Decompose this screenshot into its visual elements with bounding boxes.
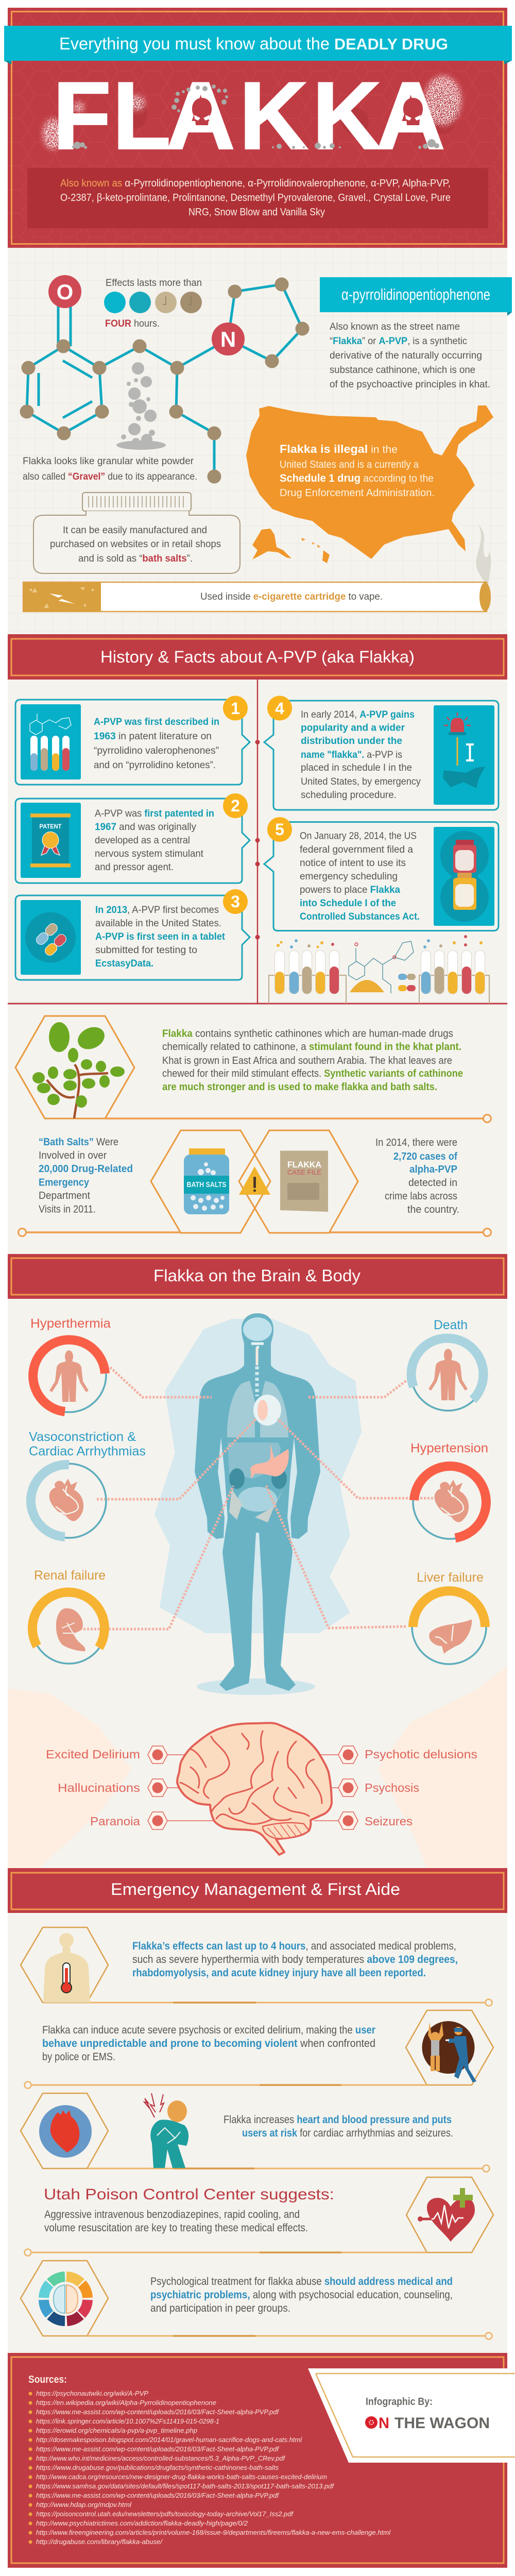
card 5: federal notice: On January 28, 2014, the US [300, 831, 417, 842]
panel: heart risk [21, 2093, 489, 2172]
badge 4 [267, 696, 292, 720]
text: crime lab cases: alpha-PVP [409, 1164, 457, 1175]
text: cathinones: Flakka contains synthetic cathinones which are human-made drugs [162, 1028, 453, 1040]
icon: patent certificate: PATENT [39, 823, 62, 830]
text: emergency visits: Department [39, 1190, 90, 1201]
text: crime lab cases: In 2014, there were [375, 1137, 457, 1148]
card 5: federal notice: Controlled Substances Act. [300, 911, 420, 922]
panel: psychological treatment: psychiatric problems, along with psychosocial education, counseling, [150, 2289, 453, 2301]
text: emergency visits: “Bath Salts” Were [39, 1137, 118, 1148]
text: crime lab cases [375, 1137, 459, 1215]
source list: http://www.fireengineering.com/articles/print/volume-168/issue-9/departments/fireems/flakka-a-new-ems-challenge.html [36, 2529, 391, 2536]
card 1: first described: 1963 in patent literature on [94, 731, 212, 742]
card 4: gains popularity: name "flakka". a-PVP is [301, 750, 402, 760]
nitrogen atom: N [220, 327, 236, 351]
illustration: brain with effects [46, 1723, 477, 1855]
card 4: gains popularity: United States, by emergency [301, 776, 421, 787]
panel: khat plant [15, 1016, 491, 1122]
panel: hyperthermia effects: such as severe hyperthermia with body temperatures above 109 degrees, [132, 1954, 458, 1965]
icon: test tubes and molecule [30, 714, 71, 771]
source list: http://drugabuse.com/library/flakka-abuse/ [36, 2538, 163, 2546]
source list: https://www.me-assist.com/wp-content/uploads/2016/03/Fact-Sheet-alpha-PVP.pdf [36, 2492, 279, 2499]
oxygen atom [48, 275, 81, 308]
icon: khat plant [32, 1022, 125, 1118]
card 2: first patented: A-PVP was first patented in [95, 808, 214, 819]
illustration: human body [154, 1313, 362, 1695]
small molecule [349, 941, 414, 993]
illustration: lab equipment [269, 935, 489, 1004]
text: gravel description: also called “Gravel” due to its appearance. [23, 471, 197, 482]
card 5: federal notice: emergency scheduling [300, 871, 398, 882]
card 1: first described [15, 696, 250, 785]
teal title ribbon [4, 26, 512, 64]
card 5: federal notice [264, 817, 499, 930]
text: illegal status: Flakka is illegal in the [280, 443, 398, 455]
heading: history and facts [8, 634, 507, 680]
card 2: first patented: developed as a central [95, 835, 190, 846]
source list [36, 2389, 391, 2546]
timeline spine [8, 680, 507, 1004]
chemical name ribbon [320, 277, 512, 316]
text: emergency visits: 20,000 Drug-Related [39, 1163, 133, 1175]
panel: also known as: Also known as α-Pyrrolidinopentiophenone, α-Pyrrolidinovalerophenone, α-PVP, Alpha-PVP, [60, 178, 451, 189]
text: illegal status: Drug Enforcement Administration. [280, 487, 435, 499]
panel: molecule and overview [8, 248, 512, 635]
panel: hyperthermia effects: Flakka’s effects can last up to 4 hours, and associated medical problems, [132, 1940, 456, 1952]
source list: https://psychonautwiki.org/wiki/A-PVP [36, 2389, 148, 2397]
effect: death [411, 1318, 485, 1411]
source list: https://en.wikipedia.org/wiki/Alpha-Pyrrolidinopentiophenone [36, 2399, 216, 2406]
effect: vasoconstriction [29, 1430, 146, 1538]
text: infographic by: Infographic By: [366, 2396, 433, 2408]
nitrogen atom [212, 323, 245, 355]
icon: warning triangle [239, 1166, 270, 1195]
badge 2 [223, 793, 248, 818]
text: street name description: derivative of the naturally occurring [330, 350, 482, 361]
card 2: first patented: and pressor agent. [95, 862, 174, 873]
source list: http://www.hdap.org/mdpv.html [36, 2501, 132, 2509]
panel: footer sources [8, 2353, 507, 2568]
card 4: gains popularity: scheduling procedure. [301, 790, 397, 801]
effect: renal failure: Renal failure [34, 1568, 106, 1583]
panel: bath salts statistics [19, 1130, 491, 1236]
card 1: first described: and on “pyrrolidino ketones”. [94, 760, 216, 771]
icon: bath salts jar: BATH SALTS [186, 1180, 227, 1189]
subtitle: Everything you must know about the DEADLY DRUG [59, 34, 448, 53]
panel: violent behaviour: Flakka can induce acute severe psychosis or excited delirium, making the user [42, 2024, 375, 2036]
panel: title header [4, 8, 512, 248]
text: crime lab cases: detected in [408, 1177, 457, 1189]
source list: http://www.psychiatrictimes.com/addiction/flakka-deadly-high/page/0/2 [36, 2519, 248, 2527]
card 4: gains popularity: distribution under the [301, 736, 402, 747]
text: street name description: “Flakka” or A-PVP, is a synthetic [330, 336, 467, 347]
card 2: first patented [15, 793, 250, 883]
section backgrounds [8, 248, 507, 2355]
panel: bottle label: purchased on websites or in retail shops [50, 539, 221, 550]
badge 3 [223, 889, 248, 914]
text: treatment [44, 2209, 308, 2234]
skull icons [192, 98, 423, 125]
brain [177, 1723, 332, 1855]
icon: gravel pile [116, 362, 166, 450]
effect: hyperthermia [30, 1316, 111, 1412]
text: four hours: FOUR hours. [105, 318, 160, 329]
panel: hyperthermia effects [21, 1927, 492, 2006]
panel: credit badge [308, 2368, 515, 2463]
text: crime lab cases: crime labs across [385, 1191, 457, 1202]
powder smudges [123, 88, 458, 134]
icon: flakka case file: CASE FILE [287, 1168, 321, 1176]
card 4: gains popularity [264, 696, 499, 810]
heading: emergency management [8, 1868, 507, 1913]
text: illegal status: United States and is a currently a [280, 459, 419, 470]
card 4: gains popularity: popularity and a wider [301, 722, 405, 734]
text: cathinones: chewed for their mild stimulant effects. Synthetic variants of cathinone [162, 1068, 463, 1079]
icon: police confrontation [422, 2021, 476, 2082]
badge 2: 2 [231, 796, 240, 815]
logo: on the wagon: THE WAGON [394, 2415, 490, 2432]
panel: violent behaviour: behave unpredictable and prone to becoming violent when confronted [42, 2038, 375, 2049]
icon: heart in circle [39, 2105, 92, 2158]
icon: e-cigarette [23, 582, 491, 612]
effect: hypertension [410, 1441, 488, 1539]
panel: violent behaviour: by police or EMS. [42, 2051, 115, 2063]
effect: vasoconstriction: Vasoconstriction & [29, 1430, 136, 1444]
badge 1 [223, 696, 248, 720]
source list: http://dosemakespoison.blogspot.com/2014/01/gravel-human-sacrifice-dogs-and-cats.html [36, 2436, 302, 2444]
panel: psychological treatment: Psychological treatment for flakka abuse should address medical and [150, 2276, 453, 2287]
text: gravel description: Flakka looks like granular white powder [23, 456, 194, 467]
brain labels: Psychosis [365, 1781, 419, 1794]
text: illegal status [280, 443, 435, 499]
effect: liver failure [412, 1570, 486, 1664]
icon: person in pain [144, 2093, 188, 2168]
text: street name description: substance cathinone, which is one [330, 365, 475, 376]
card 3: first seen in tablet: submitted for testing to [95, 945, 197, 956]
panel: also known as: O-2387, β-keto-prolintane, Prolintanone, Desmethyl Pyrovalerone, Gravel., Crystal Love, Pure [60, 192, 451, 204]
panel: violent behaviour [25, 2010, 493, 2089]
icon: pills [25, 912, 76, 962]
icon: brain wheel [44, 2277, 88, 2321]
source list: http://www.cadca.org/resources/new-designer-drug-flakka-works-bath-salts-causes-excited-delirium [36, 2473, 327, 2481]
text: treatment: volume resuscitation are key to treating these medical effects. [44, 2222, 308, 2234]
text: cathinones [162, 1028, 463, 1093]
card 2: first patented: 1967 and was originally [95, 822, 196, 833]
text: treatment: Aggressive intravenous benzodiazepines, rapid cooling, and [44, 2209, 300, 2221]
powder specks [43, 76, 461, 149]
source list: https://www.samhsa.gov/data/sites/default/files/spot117-bath-salts-2013/spot117-bath-salts-2013.pdf [36, 2482, 334, 2490]
connector lines [167, 1755, 338, 1821]
text: vape: Used inside e-cigarette cartridge to vape. [200, 591, 383, 602]
molecule diagram [20, 275, 309, 483]
card 5: federal notice: federal government filed a [300, 844, 413, 855]
icon: flakka case file: FLAKKA [287, 1160, 321, 1170]
card 4: gains popularity: In early 2014, A-PVP gains [301, 709, 415, 720]
brain labels: Seizures [365, 1815, 413, 1828]
heading: brain and body: Flakka on the Brain & Body [153, 1266, 360, 1285]
text: crime lab cases: the country. [407, 1204, 459, 1215]
badge 5 [267, 817, 292, 842]
card 5: federal notice: into Schedule I of the [300, 898, 396, 909]
card 3: first seen in tablet [15, 889, 250, 980]
source list: https://www.me-assist.com/wp-content/uploads/2016/03/Fact-Sheet-alpha-PVP.pdf [36, 2408, 279, 2416]
text: emergency visits [39, 1137, 133, 1215]
text: cathinones: Khat is grown in East Africa and southern Arabia. The khat leaves are [162, 1055, 452, 1066]
effect: hyperthermia: Hyperthermia [30, 1316, 111, 1331]
brain labels: Paranoia [90, 1815, 140, 1828]
organs [227, 1317, 289, 1522]
source list: https://www.me-assist.com/wp-content/uploads/2016/03/Fact-Sheet-alpha-PVP.pdf [36, 2445, 279, 2453]
effect: vasoconstriction: Cardiac Arrhythmias [29, 1444, 146, 1459]
source list: https://erowid.org/chemicals/a-pvp/a-pvp_timeline.php [36, 2427, 197, 2434]
effect: death: Death [434, 1318, 468, 1332]
icon: siren over map [443, 713, 485, 788]
text: cathinones: are much stronger and is used to make flakka and bath salts. [162, 1081, 437, 1093]
text: illegal status: Schedule 1 drug according to the [280, 472, 434, 484]
panel: bottle label: and is sold as “bath salts”. [78, 553, 193, 564]
brain labels: Excited Delirium [46, 1748, 140, 1761]
icon: cigarette smoke [476, 523, 491, 598]
badge 1: 1 [231, 699, 240, 718]
card 3: first seen in tablet: In 2013, A-PVP first becomes [95, 905, 219, 916]
panel: bottle label: It can be easily manufactured and [63, 525, 207, 536]
heading: history and facts: History & Facts about A-PVP (aka Flakka) [100, 648, 415, 666]
card 3: first seen in tablet: A-PVP is first seen in a tablet [95, 931, 226, 942]
icon: body with thermometer [43, 1933, 90, 2003]
text: emergency visits: Emergency [39, 1177, 90, 1188]
logo: on the wagon: N [379, 2415, 389, 2432]
card 4: gains popularity: placed in schedule I in the [301, 762, 412, 773]
card 5: federal notice: notice of intent to use its [300, 858, 406, 869]
text: street name description: of the psychoactive principles in khat. [330, 379, 490, 390]
dotted connector lines [69, 1367, 437, 1629]
bullet markers [29, 2392, 32, 2544]
effect: hypertension: Hypertension [410, 1441, 488, 1455]
source list: https://link.springer.com/article/10.1007%2Fs11419-015-0298-1 [36, 2417, 219, 2425]
icon: flakka case file [280, 1151, 328, 1212]
badge 5: 5 [275, 820, 284, 839]
brain labels: Psychotic delusions [365, 1748, 477, 1761]
source list: http://www.who.int/medicines/access/controlled-substances/5.3_Alpha-PVP_CRev.pdf [36, 2454, 285, 2462]
oxygen atom: O [57, 280, 73, 304]
brain labels: Hallucinations [58, 1781, 140, 1794]
panel: bottle label [33, 493, 240, 573]
text: street name description: Also known as the street name [330, 321, 460, 332]
card 3: first seen in tablet: EcstasyData. [95, 958, 153, 969]
gravel stones [72, 84, 439, 149]
panel: psychological treatment [21, 2261, 492, 2339]
hex markers [148, 1746, 358, 1829]
icon: patent certificate [30, 814, 71, 868]
card 1: first described: “pyrrolidino valerophenones” [94, 745, 219, 756]
text: street name description [330, 321, 490, 390]
panel: heart risk: users at risk for cardiac arrhythmias and seizures. [242, 2127, 453, 2139]
panel: also known as [27, 168, 488, 228]
main title FLAKKA: FLAKKA [53, 62, 445, 170]
brain labels [46, 1748, 477, 1828]
panel: heart risk: Flakka increases heart and blood pressure and puts [224, 2114, 452, 2126]
effect: liver failure: Liver failure [417, 1570, 484, 1585]
card 5: federal notice: powers to place Flakka [300, 885, 400, 895]
card 1: first described: A-PVP was first described in [94, 717, 219, 727]
text: emergency visits: Involved in over [39, 1150, 107, 1161]
badge 4: 4 [275, 699, 284, 718]
icon: pill jars [440, 831, 489, 922]
badge 3: 3 [231, 892, 240, 911]
decorative peach wash [8, 1666, 507, 1868]
heading: brain and body [8, 1254, 507, 1299]
panel: hyperthermia effects: rhabdomyolysis, and acute kidney injury have all been reported. [132, 1967, 426, 1979]
heading: emergency management: Emergency Management & First Aide [111, 1880, 400, 1899]
icon: four clocks [104, 292, 202, 313]
card 3: first seen in tablet: available in the United States. [95, 918, 221, 929]
heading: Utah Poison Control: Utah Poison Control Center suggests: [44, 2186, 334, 2203]
text: emergency visits: Visits in 2011. [39, 1204, 96, 1215]
source list: https://www.drugabuse.gov/publications/drugfacts/synthetic-cathinones-bath-salts [36, 2464, 279, 2471]
text: effects duration: Effects lasts more than [106, 278, 202, 289]
source list: https://poisoncontrol.utah.edu/newsletters/pdfs/toxicology-today-archive/Vol17_Iss2.pdf [36, 2510, 294, 2518]
panel: also known as: NRG, Snow Blow and Vanilla Sky [188, 207, 325, 218]
text: cathinones: chemically related to cathinone, a stimulant found in the khat plant. [162, 1041, 461, 1053]
heading: sources: Sources: [28, 2374, 67, 2385]
text: gravel description [23, 456, 197, 482]
card 2: first patented: nervous system stimulant [95, 849, 204, 859]
panel: psychological treatment: and participation in peer groups. [150, 2302, 290, 2314]
panel: poison control advice [25, 2177, 493, 2256]
icon: bath salts jar [184, 1148, 229, 1214]
text: crime lab cases: 2,720 cases of [393, 1151, 457, 1162]
effect: renal failure [32, 1568, 106, 1664]
icon: heart with pulse and cross [418, 2188, 475, 2242]
map: United States [246, 405, 493, 563]
